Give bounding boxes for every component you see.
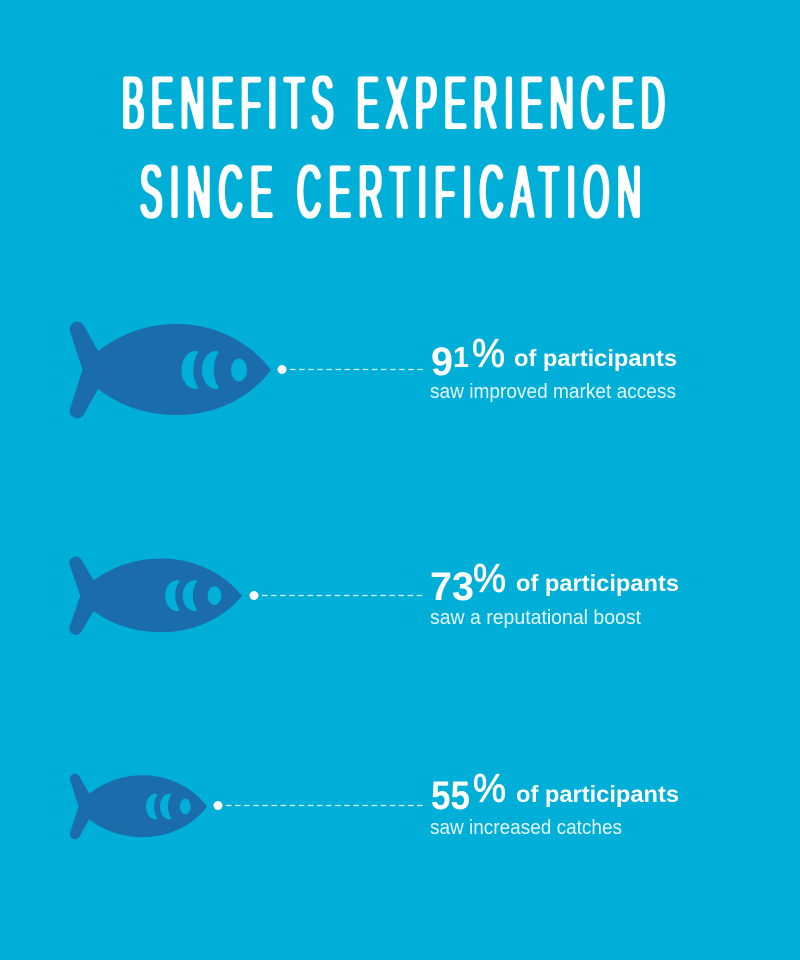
statistic: 91 percent: % xyxy=(472,332,505,376)
statistic: 73 percent: 73 xyxy=(430,565,474,609)
statistic: 55 percent xyxy=(430,767,679,839)
statistic: 73 percent xyxy=(430,557,679,629)
leader line with dot xyxy=(250,591,424,600)
leader line with dot xyxy=(278,365,424,374)
statistic: 91 percent: 9 xyxy=(431,340,453,384)
row: 91% improved market access xyxy=(70,322,677,418)
leader line with dot xyxy=(214,801,424,810)
icon: small fish xyxy=(70,774,207,839)
statistic: 55 percent: 55 xyxy=(431,774,470,818)
row: 73% reputational boost xyxy=(69,557,679,635)
title: SINCE CERTIFICATION xyxy=(140,151,641,235)
statistic: 91 percent: 1 xyxy=(453,342,469,374)
title xyxy=(122,62,665,235)
statistic: 73 percent: of participants xyxy=(516,570,679,596)
statistic: 55 percent: of participants xyxy=(516,781,679,807)
statistic: 55 percent: % xyxy=(473,767,506,811)
statistic: 73 percent: saw a reputational boost xyxy=(430,607,641,629)
row: 55% increased catches xyxy=(70,767,679,839)
icon: medium fish xyxy=(69,557,242,635)
statistic: 73 percent: % xyxy=(473,557,506,601)
statistic: 91 percent xyxy=(430,332,677,403)
statistic: 55 percent: saw increased catches xyxy=(430,817,622,839)
icon: large fish xyxy=(70,322,271,418)
statistic: 91 percent: of participants xyxy=(514,345,677,371)
statistic: 91 percent: saw improved market access xyxy=(430,381,676,403)
title: BENEFITS EXPERIENCED xyxy=(122,62,665,146)
